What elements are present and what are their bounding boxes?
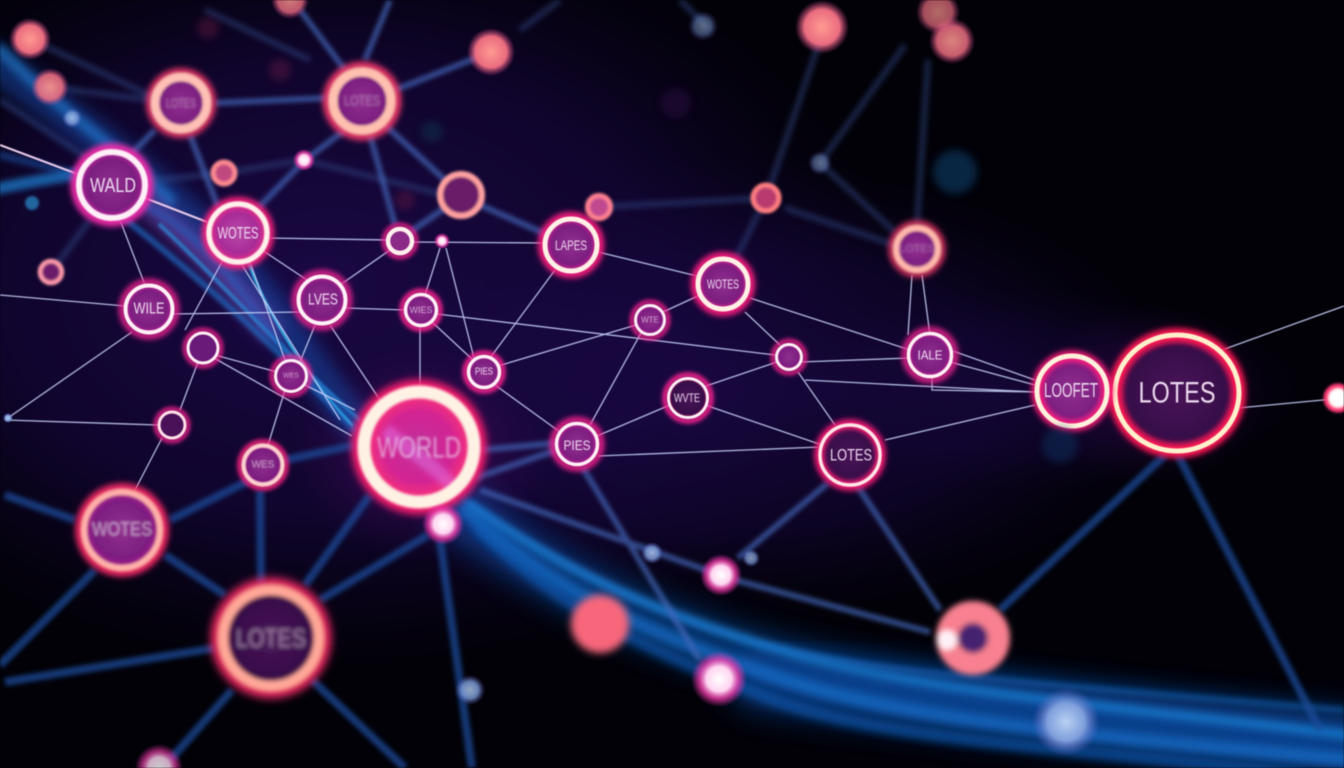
node: WOTES right: WOTES — [707, 276, 739, 292]
node: IALE — [905, 330, 955, 380]
node: LAPES — [542, 216, 600, 274]
node: LOOFET: LOOFET — [1044, 380, 1098, 402]
node: PIES — [465, 353, 503, 391]
node: small centre: WIES — [409, 305, 433, 315]
node: WILE: WILE — [134, 300, 164, 318]
node: WVTE — [665, 375, 711, 421]
node: LVES: LVES — [308, 292, 338, 308]
node: tiny right — [773, 341, 805, 373]
faint background dots — [197, 17, 1078, 463]
node: WES lower — [240, 442, 286, 488]
node: small lower left — [272, 357, 310, 395]
node: top left — [150, 72, 212, 134]
node: WALD — [75, 148, 149, 222]
node: WORLD: WORLD — [377, 432, 461, 464]
node: upper right — [892, 224, 942, 274]
node: LOTES blurred: LOTES — [236, 623, 306, 653]
blue blur dots — [3, 11, 1100, 756]
node: WOTES right — [695, 256, 751, 312]
node: LOTES medium — [819, 424, 881, 486]
node: LOTES blurred — [217, 584, 325, 692]
node: LOTES large: LOTES — [1138, 376, 1216, 410]
node: small lower left: WES — [283, 372, 299, 380]
node: PIES lower: PIES — [564, 437, 590, 453]
node: top centre: LOTES — [344, 92, 380, 110]
node: top centre — [327, 66, 397, 136]
glowing white dots — [135, 149, 747, 768]
coral blur dots — [9, 0, 975, 653]
node: PIES lower — [553, 420, 601, 468]
node: small mid right — [632, 302, 668, 338]
node: WORLD — [358, 386, 480, 508]
node: upper right: LOTES — [899, 243, 935, 255]
node: top left: LOTES — [166, 96, 196, 110]
node: WOTES blurred: WOTES — [92, 520, 152, 540]
node: LVES — [295, 273, 349, 327]
node: WES lower: WES — [252, 460, 275, 470]
node: PIES: PIES — [475, 366, 493, 378]
thin edges — [0, 145, 1344, 490]
foreground lower edges — [0, 443, 1320, 768]
small ring nodes — [156, 225, 416, 441]
node: WOTES blurred — [80, 488, 164, 572]
dim far edges — [0, 0, 928, 272]
node: IALE: IALE — [918, 348, 943, 362]
node: LAPES: LAPES — [555, 237, 587, 253]
node: LOOFET — [1037, 356, 1107, 426]
node: WILE — [122, 282, 176, 336]
node: dark centred lower right — [937, 612, 999, 664]
node: WOTES top — [206, 201, 270, 265]
node: WALD: WALD — [90, 175, 136, 197]
node: WOTES top: WOTES — [218, 224, 258, 242]
node: LOTES medium: LOTES — [830, 446, 872, 464]
blurred top edges — [130, 0, 548, 235]
blurred ring nodes — [40, 162, 1344, 410]
node: small centre — [402, 291, 440, 329]
node: WVTE: WVTE — [674, 391, 700, 405]
node: LOTES large — [1115, 335, 1239, 451]
node: small mid right: WTE — [641, 316, 659, 324]
